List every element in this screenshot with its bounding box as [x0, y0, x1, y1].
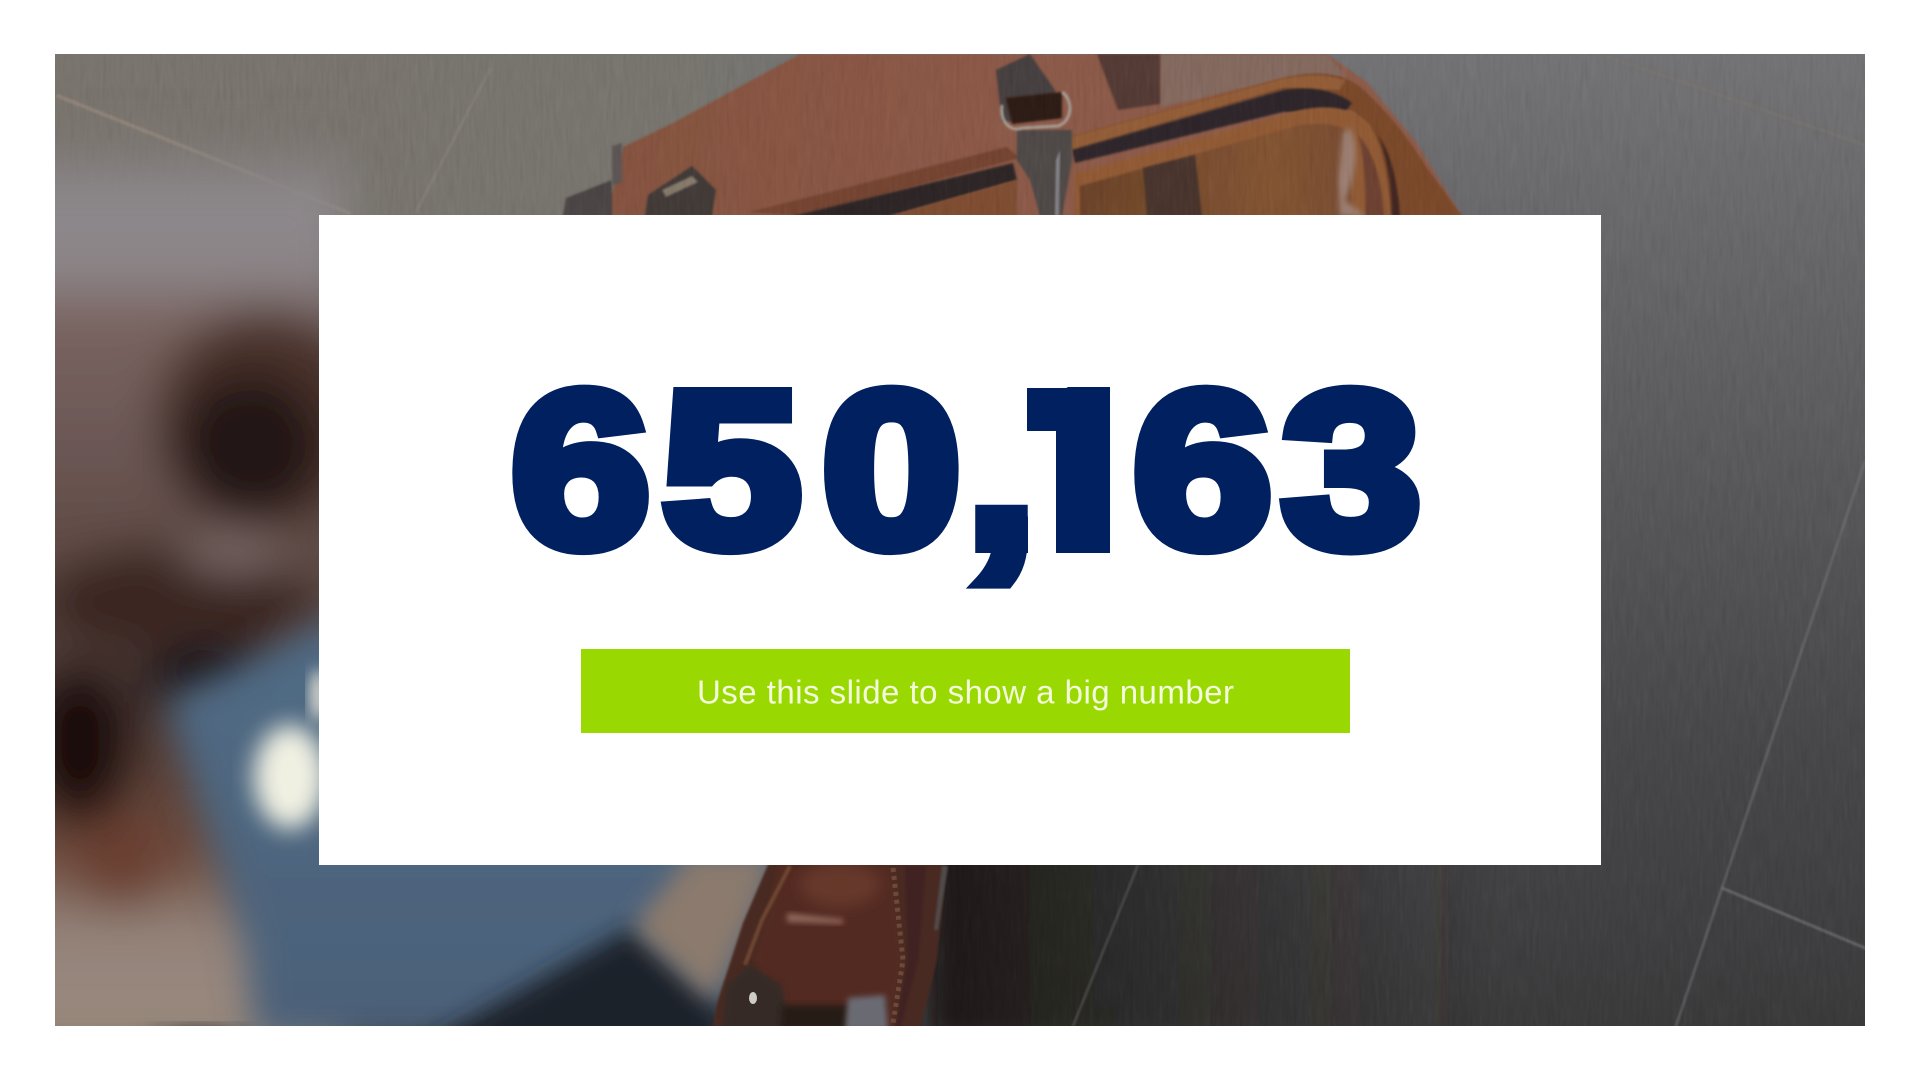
shoe — [712, 860, 948, 1030]
bag — [563, 54, 1462, 216]
zipper — [793, 163, 1017, 216]
buckle — [996, 54, 1058, 122]
green caption bar: Use this slide to show a big number — [697, 674, 1234, 710]
big number: , — [965, 339, 1037, 596]
big number: 1 — [1010, 346, 1149, 593]
blurred passport — [150, 605, 769, 1026]
upper rim and outer band — [1070, 74, 1462, 216]
pocket and lower rim — [1075, 107, 1390, 216]
white card — [319, 215, 1601, 865]
left fittings — [645, 166, 716, 216]
bag body — [563, 54, 1462, 216]
blurred hand — [55, 150, 358, 1026]
upper rear leather and strap — [1160, 54, 1345, 107]
vertical strap on pocket — [1143, 155, 1202, 216]
stitched lip left of buckle — [750, 147, 1020, 216]
big number: 63 — [1133, 346, 1421, 593]
big number: 650 — [511, 346, 961, 593]
green caption bar — [581, 649, 1350, 733]
big number — [512, 346, 1421, 593]
